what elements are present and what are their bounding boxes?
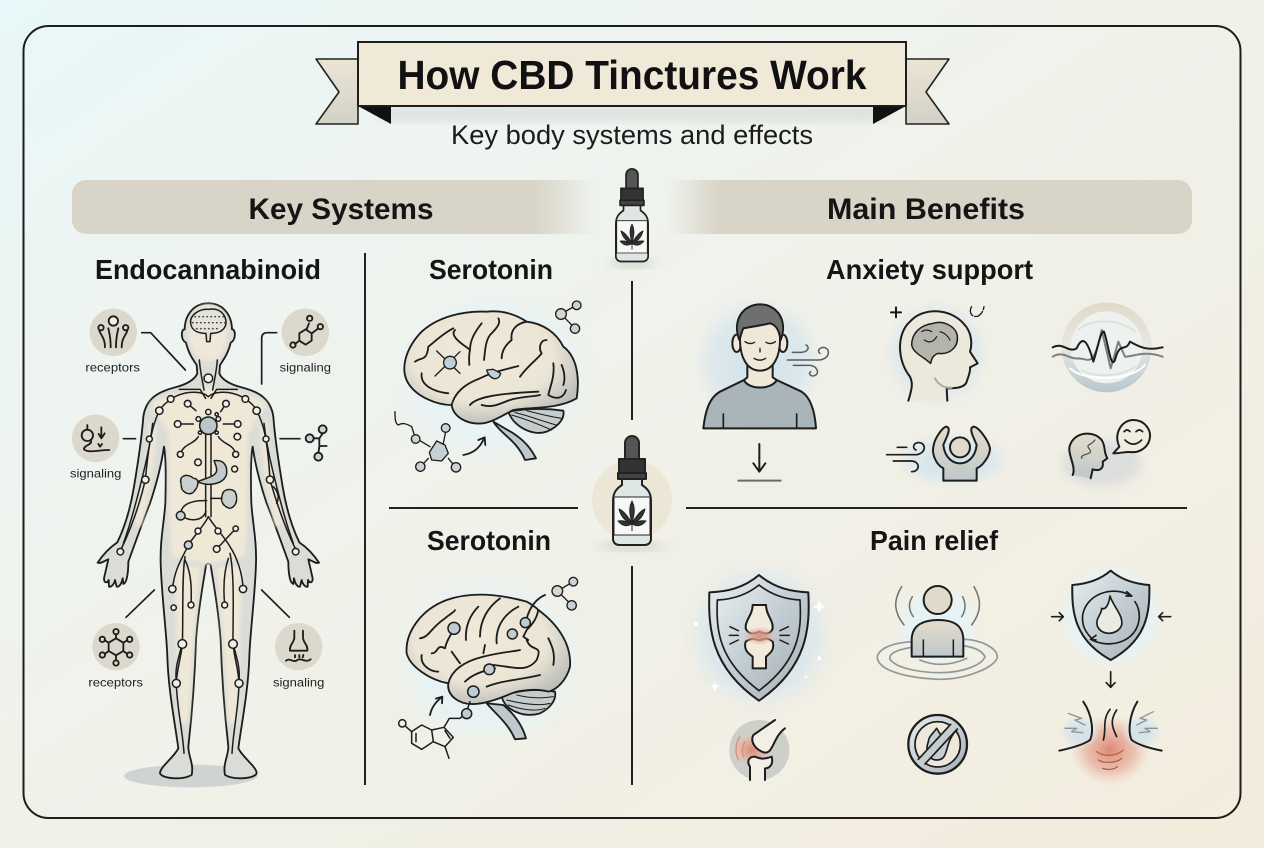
icon: down arrow and line (738, 444, 781, 481)
label: signaling top: signaling (280, 361, 331, 374)
label: signaling left: signaling (70, 467, 121, 480)
icon: large tincture bottle (592, 436, 672, 550)
subtitle: Key body systems and effects (451, 120, 813, 150)
icon: pain area with lightning (1059, 702, 1162, 785)
molecule top right (556, 301, 581, 333)
panel: pain relief (682, 525, 1171, 785)
label: receptors bottom: receptors (88, 677, 143, 690)
heading: endocannabinoid: Endocannabinoid (95, 254, 321, 285)
stomach and organs (181, 460, 237, 508)
panel: anxiety support (690, 254, 1163, 488)
icon: signaling molecule top (282, 309, 329, 356)
brain illustration top (390, 287, 597, 472)
arrow to brain bottom (430, 697, 442, 715)
title banner: How CBD Tinctures Work (398, 52, 867, 98)
section header: key systems: Key Systems (248, 193, 434, 226)
icon: molecule right (306, 425, 327, 461)
heading: serotonin top: Serotonin (429, 254, 553, 285)
icon: figure raising arms with breath (887, 427, 1013, 488)
title banner (316, 42, 949, 124)
molecule top right bottom brain (552, 577, 578, 610)
heading: pain relief: Pain relief (870, 525, 999, 556)
icon: synapse (275, 623, 322, 670)
icon: head with calm brain (882, 297, 992, 410)
molecule bottom left (395, 412, 461, 472)
nodes (117, 374, 299, 687)
icon: no pain prohibition (908, 715, 967, 774)
panel: serotonin top (390, 254, 597, 472)
icon: inflamed knee (729, 720, 789, 780)
dividers (365, 253, 1187, 785)
icon: calm person breathing (690, 293, 828, 430)
icon: shield with joint (682, 558, 838, 715)
icon: sound wave ring (1053, 302, 1163, 392)
arrows around shield (1052, 613, 1171, 687)
arrow to brain top (463, 437, 485, 455)
icon: signaling neuron (72, 415, 119, 462)
icon: head with smiling speech bubble (1062, 420, 1150, 487)
section header: main benefits: Main Benefits (827, 193, 1025, 226)
icon: person in ripples (877, 583, 997, 679)
icon: small tincture bottle (608, 169, 656, 267)
section header: key systems (72, 180, 596, 234)
indole molecule (399, 702, 472, 758)
brain illustration bottom (390, 570, 590, 758)
panel: serotonin bottom (390, 525, 590, 758)
section header: main benefits (668, 180, 1192, 234)
body diagram (70, 303, 331, 787)
icon: shield with flame (1054, 560, 1167, 673)
icon: receptors top (90, 309, 137, 356)
brain in head (191, 309, 226, 342)
connector lines (123, 333, 300, 617)
heading: anxiety support: Anxiety support (826, 254, 1033, 285)
label: signaling bottom: signaling (273, 677, 324, 690)
label: receptors: receptors (85, 361, 140, 374)
icon: receptors hexagon (92, 623, 140, 670)
heading: serotonin bottom: Serotonin (427, 525, 551, 556)
panel: endocannabinoid (70, 254, 331, 787)
